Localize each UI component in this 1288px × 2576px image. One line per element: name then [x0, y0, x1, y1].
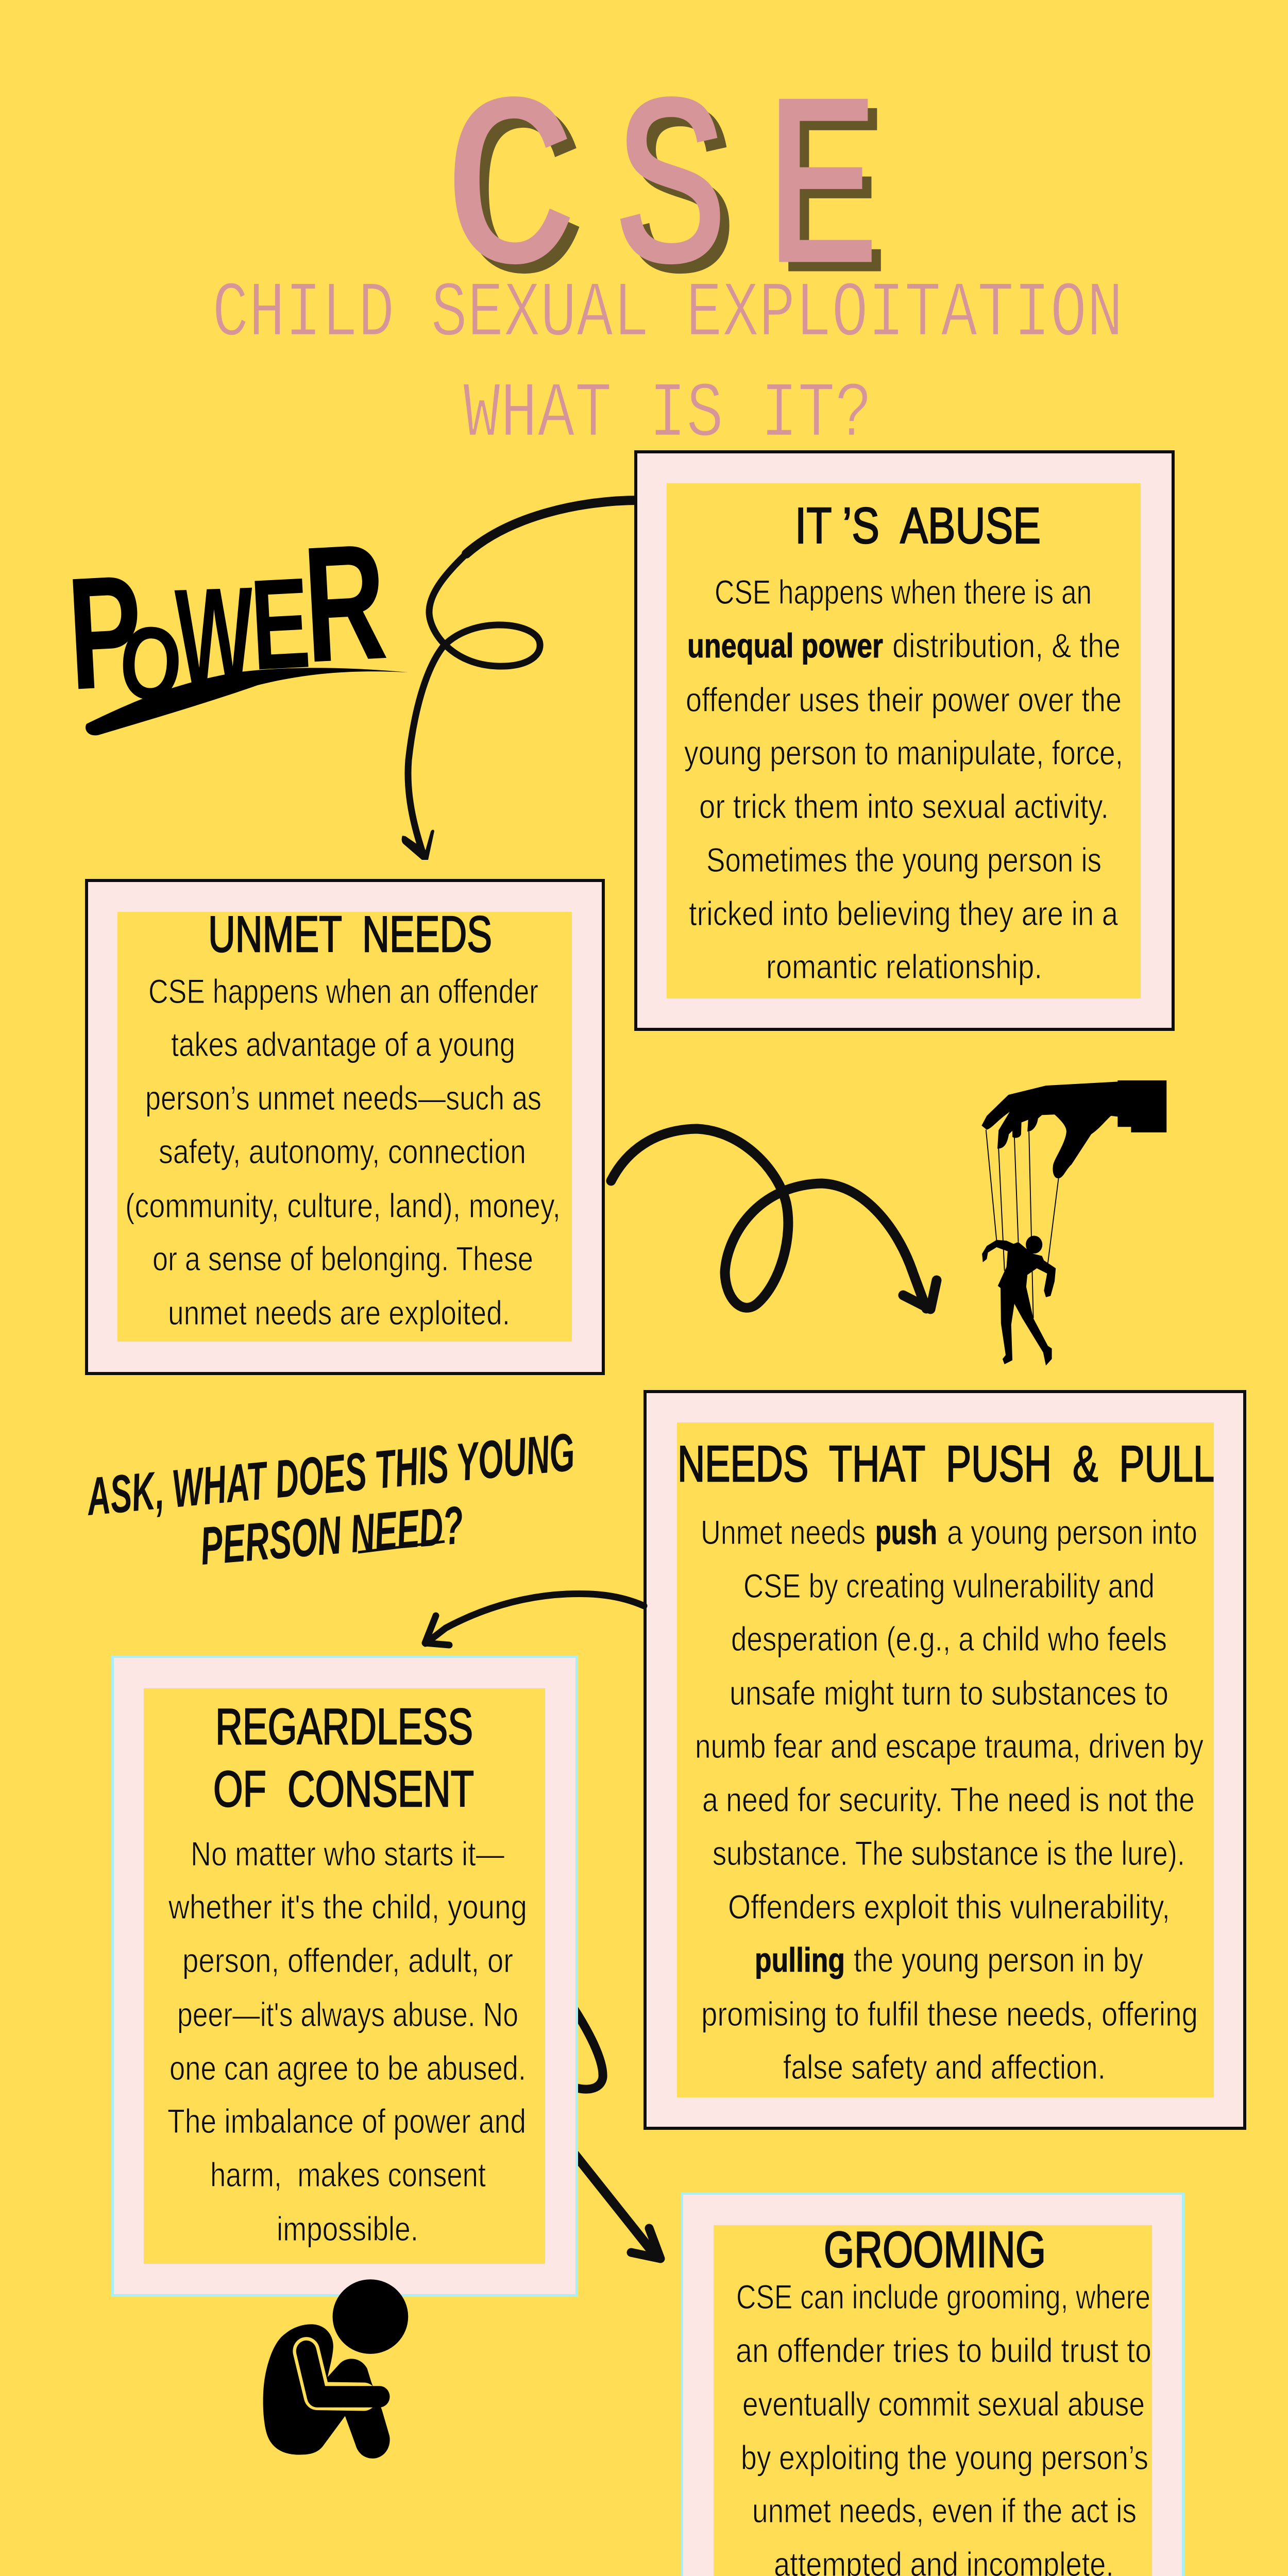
- text block: push and pull body: CSE by creating vulnerability and: [743, 1567, 1155, 1605]
- text block: regardless of consent body: person, offender, adult, or: [182, 1941, 513, 1979]
- text block: regardless of consent body: harm, makes consent: [210, 2156, 486, 2194]
- panel: regardless of consent: [112, 1657, 577, 2296]
- text block: unmet needs body: or a sense of belonging. These: [152, 1240, 533, 1278]
- text block: it's abuse body: CSE happens when there is an: [715, 573, 1092, 611]
- text block: regardless of consent body: No matter who starts it—: [191, 1835, 504, 1873]
- handwritten prompt: ask what does this young person need: [83, 1422, 577, 1577]
- text block: it's abuse body: [684, 573, 1123, 986]
- text block: regardless of consent body: one can agree to be abused.: [170, 2049, 526, 2087]
- text block: push and pull body: a need for security. The need is not the: [702, 1781, 1195, 1819]
- text block: it's abuse body: young person to manipulate, force,: [684, 734, 1123, 772]
- text block: push and pull body: unsafe might turn to substances to: [730, 1674, 1168, 1712]
- title: CSE: [444, 59, 889, 343]
- text block: it's abuse body: romantic relationship.: [766, 947, 1042, 986]
- text block: push and pull body: substance. The substance is the lure).: [713, 1834, 1185, 1872]
- text block: push and pull body: a young person into: [947, 1513, 1197, 1551]
- text block: regardless of consent body: whether it's the child, young: [168, 1888, 527, 1926]
- marionette figure: [982, 1240, 1056, 1366]
- brush lettering: power: W: [173, 557, 257, 718]
- text block: push and pull body: [695, 1513, 1204, 2086]
- text block: it's abuse body: unequal power: [687, 626, 883, 665]
- text block: grooming body: an offender tries to build trust to: [736, 2331, 1151, 2369]
- text block: it's abuse body: or trick them into sexual activity.: [699, 787, 1109, 825]
- heading: regardless of consent: OF CONSENT: [213, 1760, 474, 1817]
- text block: regardless of consent body: peer—it's always abuse. No: [177, 1995, 518, 2033]
- panel: needs that push and pull: [645, 1392, 1245, 2128]
- text block: regardless of consent body: The imbalance of power and: [167, 2102, 526, 2140]
- heading: grooming: GROOMING: [824, 2221, 1046, 2278]
- text block: grooming body: CSE can include grooming, where: [736, 2278, 1150, 2316]
- icon: puppet and hand: [981, 1080, 1166, 1366]
- heading: regardless of consent: [213, 1698, 474, 1817]
- brush lettering: power: O: [117, 604, 185, 722]
- handwritten prompt: ask what does this young person need: ASK, WHAT DOES THIS YOUNG: [83, 1422, 577, 1527]
- text block: regardless of consent body: impossible.: [277, 2210, 418, 2248]
- title: CSE: C: [444, 59, 578, 333]
- brush lettering: power: [63, 509, 408, 735]
- text block: push and pull body: the young person in by: [854, 1941, 1143, 1979]
- brush lettering: power: P: [63, 541, 147, 723]
- panel: it's abuse: [636, 452, 1173, 1029]
- arrow: unmet needs to puppet: [611, 1129, 937, 1309]
- text block: it's abuse body: offender uses their power over the: [686, 681, 1122, 719]
- heading: regardless of consent: REGARDLESS: [215, 1698, 473, 1755]
- text block: it's abuse body: distribution, & the: [892, 626, 1121, 665]
- icon: curled up child: [263, 2279, 408, 2459]
- text block: unmet needs body: unmet needs are exploited.: [168, 1294, 510, 1332]
- text block: unmet needs body: safety, autonomy, connection: [159, 1132, 526, 1171]
- text block: push and pull body: promising to fulfil these needs, offering: [701, 1995, 1198, 2033]
- title: CSE: E: [775, 68, 889, 343]
- text block: unmet needs body: [125, 972, 561, 1332]
- text block: push and pull body: Unmet needs: [701, 1513, 866, 1551]
- subtitle: what is it: WHAT IS IT?: [463, 370, 872, 459]
- text block: grooming body: eventually commit sexual abuse: [742, 2385, 1145, 2423]
- heading: unmet needs: UNMET NEEDS: [208, 906, 492, 962]
- text block: grooming body: by exploiting the young person’s: [741, 2438, 1148, 2477]
- panel: unmet needs: [87, 880, 603, 1374]
- text block: push and pull body: Offenders exploit this vulnerability,: [728, 1888, 1170, 1926]
- text block: it's abuse body: Sometimes the young person is: [706, 841, 1101, 879]
- text block: push and pull body: pulling: [755, 1941, 845, 1979]
- brush underline: [86, 668, 408, 735]
- text block: push and pull body: false safety and affection.: [783, 2048, 1106, 2086]
- arrow: regardless of consent to grooming: [569, 2002, 660, 2259]
- text block: unmet needs body: CSE happens when an offender: [148, 972, 538, 1010]
- text block: push and pull body: desperation (e.g., a child who feels: [731, 1620, 1167, 1658]
- arrow: abuse box to unmet needs box: [402, 500, 639, 860]
- text block: push and pull body: numb fear and escape trauma, driven by: [695, 1727, 1204, 1765]
- title: CSE: S: [624, 68, 737, 343]
- title: CSE: E: [766, 59, 880, 333]
- brush lettering: power: E: [247, 551, 313, 698]
- panel: grooming: [682, 2194, 1183, 2576]
- hand: [981, 1080, 1166, 1178]
- text block: grooming body: [736, 2278, 1151, 2576]
- text block: push and pull body: push: [875, 1513, 937, 1551]
- brush lettering: power: R: [299, 509, 391, 698]
- text block: unmet needs body: (community, culture, land), money,: [125, 1187, 561, 1225]
- text block: regardless of consent body: [167, 1835, 527, 2248]
- heading: it's abuse: IT ’S ABUSE: [795, 497, 1041, 554]
- text block: grooming body: unmet needs, even if the act is: [752, 2492, 1137, 2530]
- handwritten prompt: ask what does this young person need: PERSON NEED?: [198, 1495, 466, 1577]
- title: CSE: S: [615, 59, 728, 333]
- text block: it's abuse body: tricked into believing they are in a: [689, 894, 1118, 933]
- arrow: push and pull to regardless of consent: [425, 1594, 644, 1645]
- strings: [986, 1130, 1059, 1318]
- text block: unmet needs body: takes advantage of a young: [171, 1025, 515, 1063]
- text block: unmet needs body: person’s unmet needs—such as: [145, 1079, 541, 1117]
- title: CSE: C: [453, 68, 587, 343]
